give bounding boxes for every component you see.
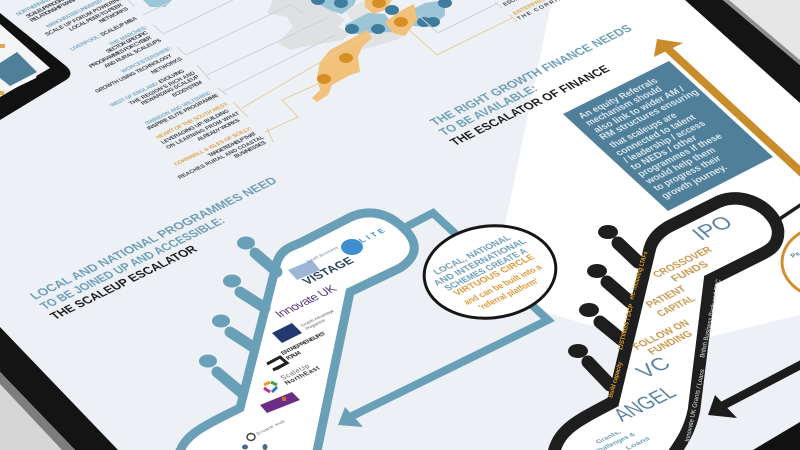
stage: patient capital bbox=[643, 284, 699, 319]
wall label: LTAFs: etc. including LTAFs bbox=[628, 250, 650, 301]
logo: Entrepreneurs' Forum: FORUM bbox=[285, 351, 303, 361]
wall label: listings: LISTINGS / DCP bbox=[617, 303, 635, 350]
callout: virtuous circle: SCHEMES CREATE A bbox=[441, 246, 530, 292]
logo: Business Growth Hub bbox=[247, 419, 286, 440]
stage: crossover funds: FUNDS bbox=[668, 259, 711, 284]
callout: virtuous circle: VIRTUOUS CIRCLE bbox=[450, 252, 537, 297]
callout: equity referrals box bbox=[563, 61, 773, 211]
logo: Vistage: VISTAGE bbox=[299, 254, 357, 287]
finance escalator stems bbox=[588, 243, 638, 385]
text: Heart of the South West: ON LEARNING FROM WHAT bbox=[165, 111, 242, 150]
white page wedge bbox=[490, 0, 800, 347]
text: The Marches: THE MARCHES: bbox=[108, 25, 149, 47]
callout: equity referrals box: RM structures ensuring bbox=[597, 88, 701, 142]
map of regions bbox=[143, 0, 452, 102]
stage: VC: VC bbox=[630, 353, 676, 382]
callout: equity referrals box: growth journey. bbox=[659, 163, 730, 201]
logo: Growth Advantage Programme: Programme bbox=[304, 318, 327, 331]
heading: local and national programmes: THE SCALEUP ESCALATOR bbox=[47, 243, 200, 322]
stage: follow on funding: FUNDING bbox=[645, 329, 696, 357]
connector lines bbox=[128, 0, 517, 142]
finance escalator outline bbox=[553, 198, 778, 450]
wall label: British Business Bank: British Business Bank and EPC bbox=[699, 278, 723, 358]
escalator outline bbox=[178, 213, 414, 450]
text: Worcestershire: GROWTH USING TECHNOLOGY bbox=[94, 54, 174, 94]
logo: Entrepreneurs' Forum bbox=[267, 331, 328, 370]
logo: small icons bbox=[242, 444, 268, 450]
tablet frame bottom left bbox=[0, 327, 118, 450]
logo: blue block: Small Business bbox=[305, 245, 340, 264]
callout: equity referrals box: to progress their bbox=[651, 154, 724, 193]
callout: equity referrals box: programmes if these bbox=[635, 132, 726, 179]
region list text bbox=[15, 0, 575, 180]
logo: colour ring bbox=[264, 382, 277, 392]
finance escalator dots bbox=[568, 225, 618, 358]
heading: local and national programmes: LOCAL AND NATIONAL PROGRAMMES NEED bbox=[27, 175, 280, 302]
text: Manchester: NETWORKS bbox=[98, 7, 131, 24]
callout: equity referrals box: / leadership / access bbox=[621, 119, 709, 165]
stage: grants: Grants, bbox=[594, 429, 623, 445]
stage: patient capital: CAPITAL bbox=[654, 294, 699, 319]
callout: equity referrals box: to NEDs / other bbox=[628, 134, 700, 172]
text: The Marches: AND RURAL SCALEUPS bbox=[103, 38, 163, 69]
escalator stems bbox=[217, 253, 277, 393]
logo: Growth Advantage Programme: Growth Advantage bbox=[299, 308, 336, 328]
text: Cornwall: BUSINESSES bbox=[233, 140, 268, 159]
text: Worcestershire: WORCESTERSHIRE: bbox=[120, 46, 174, 74]
text: top right labels bbox=[502, 0, 575, 21]
logo: blue block bbox=[288, 245, 340, 280]
logo: ScaleUp North East: NorthEast bbox=[283, 365, 322, 386]
logo: Innovate UK: Innovate UK bbox=[272, 282, 340, 320]
escalator dots bbox=[199, 236, 255, 368]
text: Cornwall: REACHES RURAL AND COASTAL bbox=[177, 135, 267, 180]
stage: IPO: IPO bbox=[686, 211, 738, 244]
text: The Marches: PROGRAMMES FOR CYBER bbox=[88, 35, 154, 69]
callout: equity referrals box: mechanism should bbox=[583, 85, 665, 128]
text: Northern bbox=[15, 0, 92, 23]
text: West of England: ECOSYSTEM bbox=[171, 80, 204, 98]
heading: right growth finance: TO BE AVAILABLE: bbox=[436, 83, 541, 138]
black arrow to finance escalator bbox=[708, 360, 800, 418]
text: Manchester: LOCAL PEER-TO-PEER bbox=[68, 3, 125, 32]
callout: equity referrals box: An equity Referrals bbox=[576, 76, 661, 121]
heading: right growth finance: THE RIGHT GROWTH FINANCE NEEDS bbox=[427, 23, 635, 128]
logo: Elite bbox=[341, 227, 387, 255]
tablet frame bottom right bbox=[753, 422, 800, 450]
callout: virtuous circle: 'referral platform' bbox=[475, 276, 541, 311]
text: West of England: WEST OF ENGLAND: EVOLVING bbox=[109, 69, 187, 108]
text: Heart of the South West: LEVERAGING UP: BUILDING bbox=[160, 109, 232, 145]
callout: equity referrals box: that scaleups are bbox=[607, 111, 680, 150]
text: Cornwall: TARGETED HELP THAT bbox=[207, 131, 259, 158]
callout: virtuous circle bbox=[420, 219, 560, 325]
text: Worcestershire: NETWORKS bbox=[150, 57, 184, 75]
text: The Marches: SECTOR SPECIFIC bbox=[105, 31, 150, 54]
stage: crossover funds: CROSSOVER bbox=[650, 245, 715, 280]
branch line bbox=[775, 204, 800, 222]
logo: Entrepreneurs' Forum: ENTREPRENEURS' bbox=[280, 331, 328, 356]
callout: virtuous circle: and can be built into a bbox=[460, 262, 545, 306]
map: teal regions bbox=[312, 0, 356, 14]
heading: right growth finance: THE ESCALATOR OF FINANCE bbox=[447, 63, 613, 148]
callout: virtuous circle: LOCAL, NATIONAL bbox=[430, 233, 513, 276]
stage: angel: ANGEL bbox=[607, 382, 681, 425]
text: Swindon and Wiltshire: INSPIRE ELITE PROGRAMME bbox=[146, 93, 221, 131]
orange circle callout bbox=[782, 225, 800, 299]
small tablet mockup bbox=[0, 13, 70, 120]
logo: ScaleUp North East: ScaleUp bbox=[279, 363, 312, 381]
map: orange regions bbox=[312, 30, 372, 102]
callout: virtuous circle: AND INTERNATIONAL bbox=[430, 236, 529, 287]
stage: patient capital: PATIENT bbox=[643, 284, 689, 310]
logo: purple banner bbox=[260, 392, 300, 413]
text: Heart of the South West: HEART OF THE SOUTH WEST: bbox=[155, 102, 231, 140]
tablet frame top right bbox=[685, 0, 800, 103]
scaleup escalator bbox=[178, 213, 414, 450]
callout: equity referrals box: also link to wider AM / bbox=[591, 85, 688, 135]
text: Heart of the South West: ALREADY WORKS bbox=[196, 118, 242, 142]
heading: local and national programmes: TO BE JOINED UP AND ACCESSIBLE: bbox=[37, 215, 228, 312]
text: Swindon and Wiltshire: SWINDON AND WILTSHIRE: bbox=[144, 90, 214, 126]
escalator of finance bbox=[553, 198, 800, 450]
callout: equity referrals box: would help them bbox=[642, 146, 719, 186]
map: grey regions bbox=[267, 0, 350, 50]
map: region markers bbox=[311, 0, 325, 5]
wall label: Innovate UK: Innovate UK Grants / Loans bbox=[684, 368, 706, 442]
logo: Growth Advantage Programme bbox=[272, 308, 336, 343]
stage: grants bbox=[592, 429, 652, 450]
text: The Marches bbox=[88, 25, 163, 69]
orange up arrow bbox=[654, 39, 800, 185]
callout: equity referrals box: connected to talent bbox=[613, 113, 699, 158]
text: West of England: REWARDING SCALEUP bbox=[140, 75, 201, 106]
logo: Elite: LITE bbox=[357, 227, 387, 244]
logo: Business Growth Hub: Growth Hub bbox=[255, 419, 286, 436]
wall label: build capacity: Build capacity bbox=[607, 361, 624, 399]
teal arrow to scaleup escalator bbox=[338, 213, 548, 427]
text: Cornwall: CORNWALL & ISLES OF SCILLY: bbox=[173, 126, 254, 167]
text: Liverpool: LIVERPOOL: SCALEUP MBA bbox=[69, 16, 139, 52]
text: West of England: THE REGION'S RICH AND bbox=[128, 71, 197, 106]
stage: follow on funding: FOLLOW ON bbox=[630, 318, 692, 352]
